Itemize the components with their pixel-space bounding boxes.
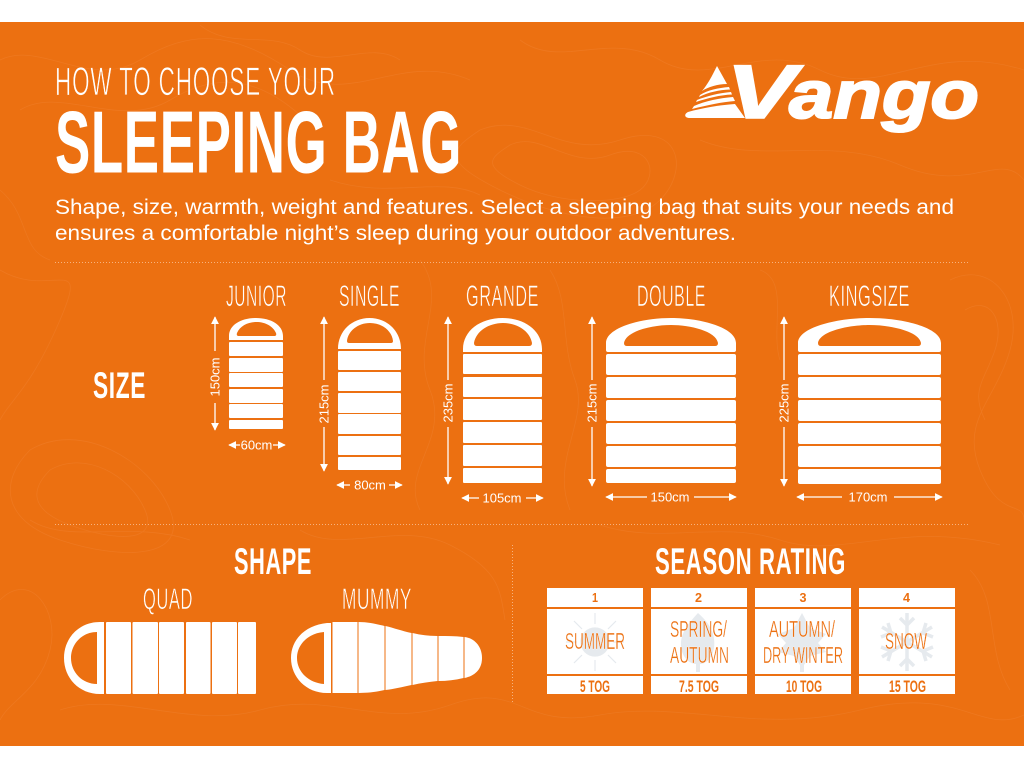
label: JUNIOR bbox=[226, 280, 287, 313]
season name: AUTUMN bbox=[670, 642, 729, 668]
season name: DRY WINTER bbox=[763, 642, 843, 668]
main box bbox=[859, 609, 955, 674]
tog box: 7.5 TOG bbox=[679, 677, 719, 696]
panel: double bbox=[584, 280, 736, 504]
label: SINGLE bbox=[339, 280, 400, 313]
panel: single bbox=[316, 280, 402, 492]
panel: season 3 bbox=[755, 588, 851, 696]
width arrow bbox=[462, 490, 543, 506]
title line one: HOW TO CHOOSE YOUR bbox=[55, 60, 336, 104]
bag bbox=[798, 318, 941, 484]
panel: grande bbox=[440, 280, 543, 506]
panel: mummy shape bbox=[291, 583, 482, 693]
height arrow: 235cm bbox=[440, 383, 456, 423]
width arrow: 80cm bbox=[354, 478, 386, 492]
season name: SPRING/ bbox=[670, 616, 727, 642]
heading: season rating: SEASON RATING bbox=[655, 541, 846, 582]
logo mountain icon bbox=[685, 66, 745, 118]
season name: SNOW bbox=[885, 628, 927, 654]
width arrow: 170cm bbox=[848, 490, 888, 504]
heading: shape: SHAPE bbox=[234, 541, 312, 582]
bag bbox=[606, 318, 736, 483]
panel: season 2 bbox=[651, 588, 747, 696]
panel: kingsize bbox=[776, 280, 942, 504]
width arrow: 150cm bbox=[650, 490, 690, 504]
icon: sun bbox=[566, 613, 624, 671]
intro text bbox=[55, 196, 954, 245]
height arrow: 215cm bbox=[316, 384, 332, 424]
height arrow: 150cm bbox=[208, 357, 222, 397]
title line two: SLEEPING BAG bbox=[55, 92, 462, 192]
width arrow: 60cm bbox=[241, 438, 272, 452]
icon: leaf bbox=[681, 613, 714, 672]
panel: season 4 bbox=[859, 588, 955, 696]
icon: maple leaf bbox=[778, 613, 826, 672]
number box: 1 bbox=[592, 590, 598, 605]
icon: snowflake bbox=[881, 613, 933, 671]
mummy bag bbox=[291, 622, 482, 693]
bag bbox=[338, 318, 401, 470]
height arrow bbox=[208, 317, 222, 430]
label: KINGSIZE bbox=[829, 280, 910, 313]
width arrow bbox=[606, 490, 736, 504]
tog box: 5 TOG bbox=[580, 677, 610, 696]
width arrow bbox=[229, 438, 285, 452]
intro text: Shape, size, warmth, weight and features. Select a sleeping bag that suits your needs and bbox=[55, 196, 954, 219]
bag bbox=[229, 318, 283, 429]
tog box: 15 TOG bbox=[889, 677, 926, 696]
logo: Vango bbox=[685, 50, 979, 135]
main box bbox=[651, 609, 747, 674]
bag bbox=[463, 318, 542, 483]
logo wordmark: V bbox=[726, 50, 803, 135]
width arrow: 105cm bbox=[482, 490, 522, 506]
logo: Vango: ango bbox=[789, 57, 979, 133]
main box bbox=[547, 609, 643, 674]
label: QUAD bbox=[143, 583, 193, 616]
season name: SUMMER bbox=[565, 628, 625, 654]
panel: quad shape bbox=[64, 583, 256, 694]
season name bbox=[670, 616, 729, 668]
title bbox=[55, 60, 462, 192]
height arrow: 215cm bbox=[584, 383, 600, 423]
season name bbox=[763, 616, 843, 668]
season name: AUTUMN/ bbox=[769, 616, 835, 642]
panel: season 1 bbox=[547, 588, 643, 696]
number box: 2 bbox=[695, 590, 702, 605]
width arrow bbox=[337, 478, 402, 492]
intro text: ensures a comfortable night’s sleep during your outdoor adventures. bbox=[55, 222, 736, 245]
label: MUMMY bbox=[342, 583, 412, 616]
label: DOUBLE bbox=[637, 280, 706, 313]
label: GRANDE bbox=[466, 280, 539, 313]
panel: junior bbox=[208, 280, 287, 452]
tog box: 10 TOG bbox=[786, 677, 822, 696]
main box bbox=[755, 609, 851, 674]
number box: 4 bbox=[903, 590, 911, 605]
quad bag bbox=[64, 622, 256, 694]
number box: 3 bbox=[800, 590, 806, 605]
heading: size: SIZE bbox=[93, 365, 146, 406]
height arrow: 225cm bbox=[776, 383, 792, 423]
